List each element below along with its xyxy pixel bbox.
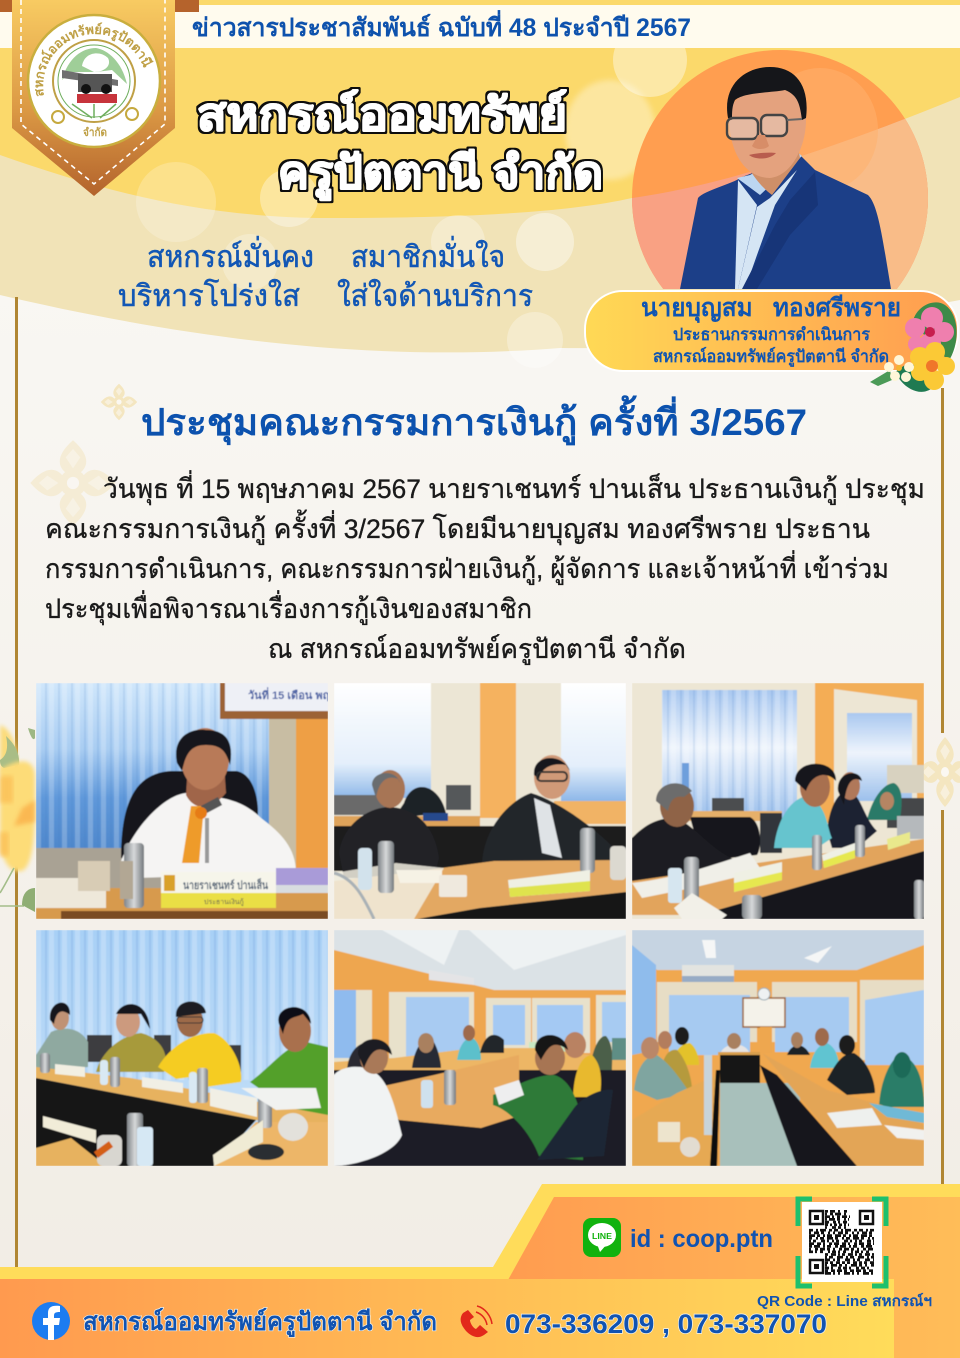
- line id: id : coop.ptn: [630, 1225, 773, 1253]
- icon: line: LINE: [592, 1231, 612, 1241]
- heading: meeting title: ประชุมคณะกรรมการเงินกู้ ครั้งที่ 3/2567: [141, 395, 807, 446]
- body paragraph: ประชุมเพื่อพิจารณาเรื่องการกู้เงินของสมาชิก: [45, 590, 532, 626]
- photo 2: two committee members: [334, 683, 626, 919]
- main organisation title: ครูปัตตานี จำกัด: [278, 147, 603, 201]
- photo 1: chairman speaking: ประธานเงินกู้: [204, 898, 244, 906]
- president name pill: [585, 291, 958, 371]
- slogan: ใส่ใจด้านบริการ: [337, 279, 533, 313]
- icon: facebook: [32, 1302, 70, 1340]
- yellow flower left: [0, 725, 35, 912]
- icon: line: [583, 1218, 621, 1257]
- side rules: [15, 297, 944, 1267]
- slogan: สมาชิกมั่นใจ: [351, 236, 505, 274]
- footer background: [0, 1184, 960, 1358]
- president name pill: นายบุญสม ทองศรีพราย: [641, 294, 901, 324]
- photo 4: four members reading: [36, 930, 328, 1166]
- photo 1: chairman speaking: วันที่ 15 เดือน พฤษ: [248, 687, 337, 702]
- flower bouquet: [870, 302, 957, 392]
- ribbon badge with logo: สหกรณ์ออมทรัพย์ครูปัตตานี: [35, 22, 154, 96]
- photo grid: [36, 683, 924, 1166]
- president name pill: ประธานกรรมการดำเนินการ: [673, 325, 871, 344]
- body paragraph: วันพุธ ที่ 15 พฤษภาคม 2567 นายราเชนทร์ ปานเส็น ประธานเงินกู้ ประชุม: [103, 470, 925, 506]
- top strip: [0, 0, 960, 48]
- slogan: บริหารโปร่งใส: [118, 278, 300, 313]
- slogan: สหกรณ์มั่นคง: [147, 236, 314, 274]
- thai ornaments: [30, 384, 960, 807]
- main organisation title: [197, 89, 603, 201]
- photo 1: chairman speaking: นายราเชนทร์ ปานเส็น: [183, 878, 268, 892]
- qr caption: QR Code : Line สหกรณ์ฯ: [757, 1292, 932, 1310]
- phone numbers: 073-336209 , 073-337070: [505, 1309, 827, 1339]
- photo 1: chairman speaking: [36, 683, 337, 919]
- body paragraph: [45, 470, 925, 665]
- ribbon badge with logo: [12, 0, 175, 196]
- slogan: [118, 236, 533, 313]
- president portrait: [632, 50, 928, 289]
- body paragraph: ณ สหกรณ์ออมทรัพย์ครูปัตตานี จำกัด: [268, 633, 686, 665]
- photo 6: full room view: [632, 930, 924, 1166]
- president name pill: สหกรณ์ออมทรัพย์ครูปัตตานี จำกัด: [653, 346, 889, 368]
- newsletter heading: ข่าวสารประชาสัมพันธ์ ฉบับที่ 48 ประจำปี 2567: [192, 10, 691, 42]
- photo 3: members along table: [632, 683, 924, 919]
- header background waves: [0, 0, 960, 368]
- icon: phone: [461, 1306, 492, 1337]
- photo 5: room view from side: [334, 930, 626, 1166]
- body paragraph: กรรมการดำเนินการ, คณะกรรมการฝ่ายเงินกู้, ผู้จัดการ และเจ้าหน้าที่ เข้าร่วม: [45, 550, 889, 585]
- main organisation title: สหกรณ์ออมทรัพย์: [197, 89, 567, 140]
- facebook page name: สหกรณ์ออมทรัพย์ครูปัตตานี จำกัด: [83, 1307, 437, 1338]
- qr code: [798, 1199, 886, 1286]
- body paragraph: คณะกรรมการเงินกู้ ครั้งที่ 3/2567 โดยมีนายบุญสม ทองศรีพราย ประธาน: [45, 509, 870, 546]
- ribbon badge with logo: จำกัด: [83, 126, 107, 139]
